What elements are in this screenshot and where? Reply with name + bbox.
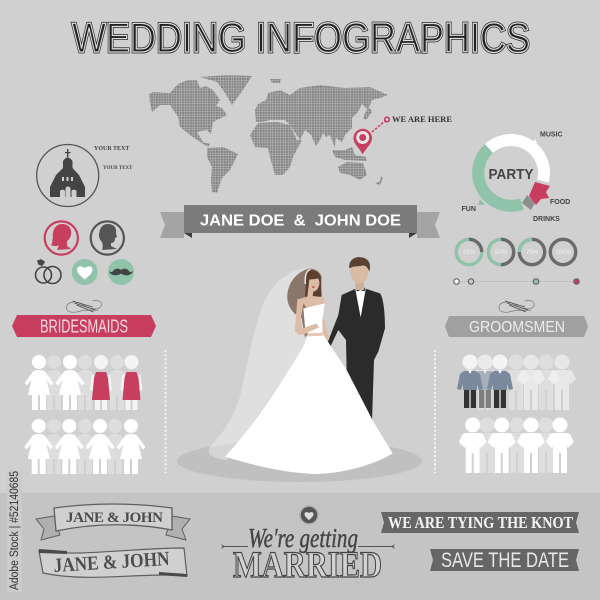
eurasia [255, 85, 388, 148]
bride skin [295, 276, 329, 341]
percentage rings: 50% [495, 250, 508, 256]
north america [149, 80, 227, 147]
party donut chart [462, 132, 570, 223]
ribbon: jane and john wavy: JANE & JOHN [53, 548, 171, 577]
fun segment [478, 148, 522, 206]
bride forearm [296, 323, 319, 335]
party donut chart: PARTY [488, 167, 534, 183]
ribbon: jane and john arched [36, 504, 190, 540]
iceland [270, 79, 281, 83]
ribbon: jane and john arched: JANE & JOHN [66, 510, 163, 526]
icon: bride silhouette [45, 221, 78, 255]
africa [250, 122, 302, 175]
floor shadow [177, 440, 422, 482]
flourish right [499, 300, 534, 312]
lockup: we're getting married: We're getting [248, 523, 358, 553]
veil [209, 267, 312, 460]
bridesmaids figures [24, 355, 146, 474]
icon: heart [72, 259, 98, 285]
timeline dots [454, 279, 579, 284]
bridesmaids banner [12, 315, 156, 337]
dotted world map [149, 75, 388, 193]
groom [328, 257, 385, 422]
title: WEDDING INFOGRAPHICS [72, 14, 530, 61]
lockup: we're getting married [221, 506, 395, 586]
percentage rings: 25% [463, 250, 476, 256]
party donut chart: DRINKS [533, 216, 560, 223]
groomsmen banner: GROOMSMEN [469, 319, 565, 336]
groomsmen figures [457, 354, 576, 473]
australia [338, 162, 367, 180]
central name banner [160, 205, 440, 238]
location pin and label [354, 115, 452, 154]
bride hair and veil back [287, 268, 322, 337]
bottom band [0, 493, 600, 600]
title: WEDDING INFOGRAPHICS [72, 14, 530, 61]
japan [363, 108, 372, 120]
church icon with labels: YOUR TEXT [94, 146, 129, 152]
indonesia [332, 147, 367, 161]
party donut chart: MUSIC [540, 132, 563, 138]
greenland [200, 75, 252, 105]
couple illustration [209, 257, 393, 474]
lockup: we're getting married: MARRIED [233, 545, 382, 586]
party donut chart: FUN [462, 206, 476, 213]
church icon with labels: YOUR TEXT [103, 166, 133, 171]
new zealand [375, 176, 383, 185]
vertical stock label: Adobe Stock | #52140685 [9, 471, 21, 590]
location pin and label: WE ARE HERE [392, 115, 452, 124]
flourish left [66, 300, 102, 312]
church icon with labels [37, 144, 133, 206]
percentage rings: 75% [526, 250, 539, 256]
icon: groom silhouette [91, 221, 124, 255]
groomsmen banner [445, 316, 588, 337]
percentage rings [456, 239, 576, 265]
percentage rings: 100% [555, 250, 571, 256]
central name banner: JANE DOE & JOHN DOE [200, 212, 401, 230]
party donut chart: FOOD [550, 199, 570, 206]
icon: wedding rings [36, 260, 61, 284]
south america [207, 147, 238, 193]
bride fringe and headband [307, 272, 320, 279]
banner: save the date: SAVE THE DATE [441, 549, 569, 572]
wedding dress [225, 303, 393, 474]
bridesmaids banner: BRIDESMAIDS [40, 316, 128, 336]
music segment [489, 140, 544, 181]
icon: moustache [108, 259, 134, 285]
bride sash [308, 333, 323, 336]
